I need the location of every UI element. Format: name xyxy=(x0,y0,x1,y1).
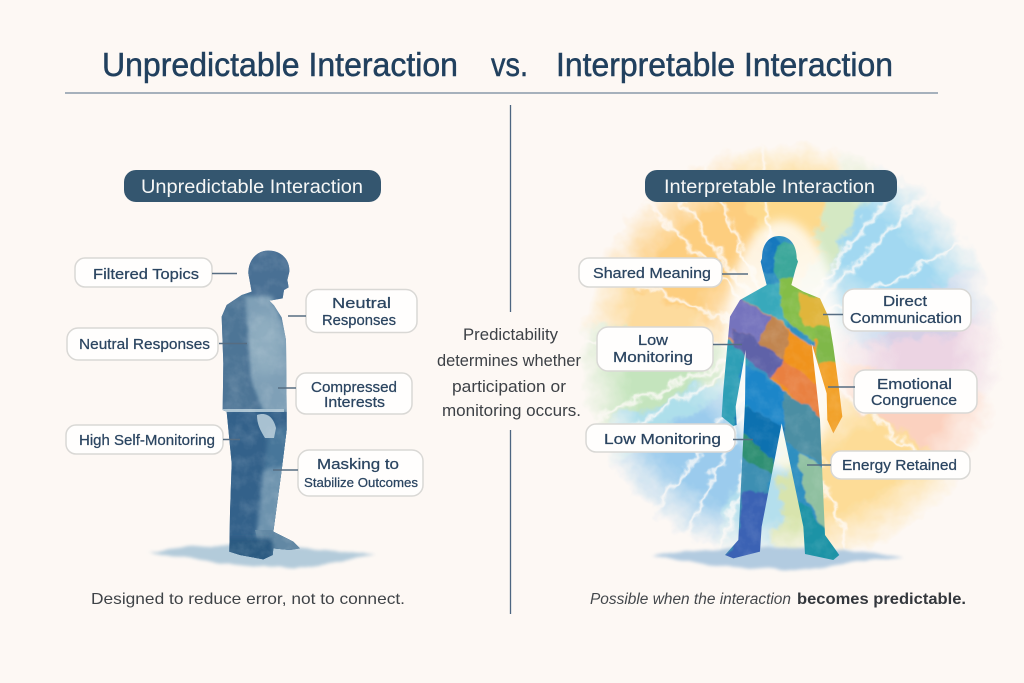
callout: direct communication: Direct xyxy=(883,293,928,310)
callout: high self-monitoring: High Self-Monitoring xyxy=(79,432,215,449)
callout: filtered topics xyxy=(75,258,237,287)
center statement xyxy=(437,325,581,420)
caption: right: Possible when the interaction xyxy=(590,591,791,608)
decorative white streaks xyxy=(580,140,970,560)
center statement: monitoring occurs. xyxy=(442,401,581,420)
center statement: determines whether xyxy=(437,351,581,370)
decorative mottling xyxy=(222,251,291,558)
callout: energy retained xyxy=(807,451,970,479)
callout: direct communication: Communication xyxy=(850,310,962,327)
title: vs. xyxy=(491,46,528,83)
panel: unpredictable interaction xyxy=(66,170,423,608)
callout: emotional congruence: Congruence xyxy=(871,392,957,409)
caption: left: Designed to reduce error, not to connect. xyxy=(91,591,405,608)
title: Interpretable Interaction xyxy=(556,46,893,83)
central glow behind figure xyxy=(724,220,840,470)
callout: shared meaning: Shared Meaning xyxy=(593,265,711,282)
ground shadow: left figure xyxy=(149,544,376,568)
callout: neutral responses right: Responses xyxy=(322,312,396,329)
callout: high self-monitoring xyxy=(66,425,240,454)
ground shadow: right figure xyxy=(653,547,903,570)
upper torso colors xyxy=(742,282,788,328)
figure: side-facing muted silhouette xyxy=(222,250,300,560)
callout: low monitoring two-line xyxy=(597,327,742,371)
title xyxy=(102,46,893,83)
callout: neutral responses left: Neutral Responses xyxy=(79,336,210,353)
callout: low monitoring two-line: Monitoring xyxy=(613,349,693,366)
heading pill: unpredictable: Unpredictable Interaction xyxy=(141,177,363,198)
callout: shared meaning xyxy=(579,258,748,287)
callout: emotional congruence: Emotional xyxy=(877,376,952,393)
callout: filtered topics: Filtered Topics xyxy=(93,266,199,283)
center statement: participation or xyxy=(452,377,566,396)
callout: neutral responses right: Neutral xyxy=(332,295,391,312)
heading pill: unpredictable xyxy=(124,170,381,202)
callout: compressed interests xyxy=(278,373,412,414)
callout: masking to stabilize outcomes: Masking to xyxy=(317,456,399,473)
callout: masking to stabilize outcomes: Stabilize Outcomes xyxy=(304,475,419,490)
callout: compressed interests: Compressed xyxy=(311,379,397,396)
caption: right xyxy=(590,591,966,608)
callout: low monitoring two-line: Low xyxy=(638,332,668,349)
heading pill: interpretable xyxy=(645,170,897,202)
callout: emotional congruence xyxy=(828,370,977,413)
diagonal band xyxy=(728,298,820,419)
heading pill: interpretable: Interpretable Interaction xyxy=(664,177,875,198)
left arm xyxy=(722,339,748,426)
figure: front-facing multicolor silhouette xyxy=(722,236,842,560)
radiating watercolor burst xyxy=(580,140,970,560)
callout: compressed interests: Interests xyxy=(324,394,385,411)
center statement: Predictability xyxy=(463,325,558,344)
lower torso and legs xyxy=(740,360,787,430)
caption: right: becomes predictable. xyxy=(797,591,966,608)
callout: masking to stabilize outcomes xyxy=(273,450,423,496)
callout: low monitoring xyxy=(586,424,753,452)
callout: low monitoring: Low Monitoring xyxy=(604,431,721,448)
callout: energy retained: Energy Retained xyxy=(842,457,957,474)
panel: interpretable interaction xyxy=(579,140,977,608)
decorative mottling xyxy=(722,238,842,560)
callout: direct communication xyxy=(823,289,971,331)
callout: neutral responses left xyxy=(67,328,247,360)
callout: neutral responses right xyxy=(288,290,417,332)
title: Unpredictable Interaction xyxy=(102,46,458,83)
head colors xyxy=(760,236,780,274)
